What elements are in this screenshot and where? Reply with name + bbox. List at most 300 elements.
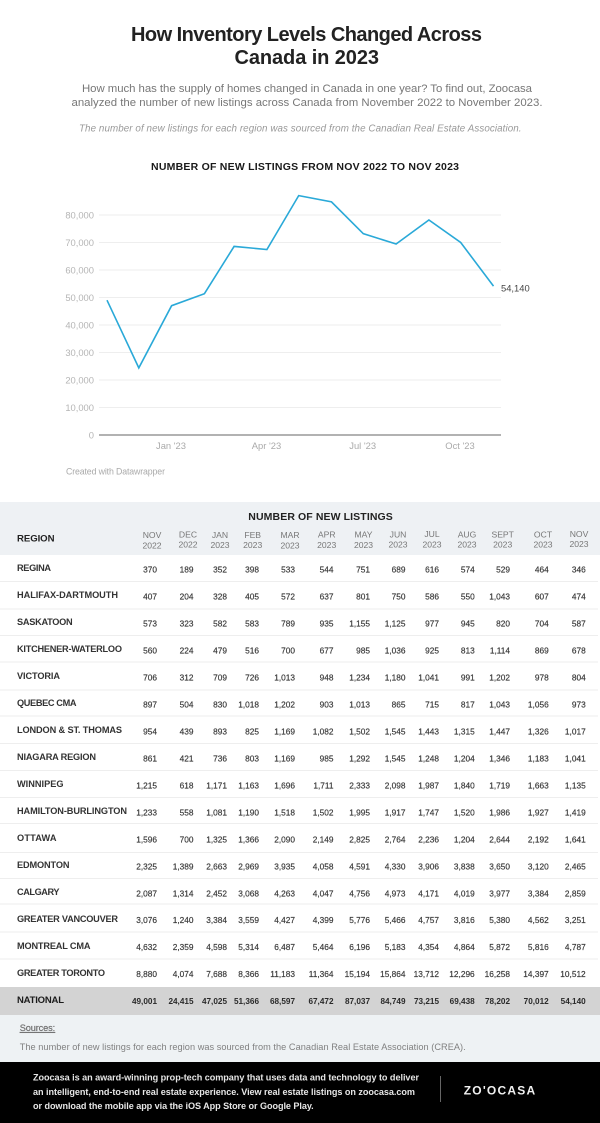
y axis labels: [65, 210, 94, 440]
row: Victoria: 804: [572, 673, 586, 683]
x axis labels: [156, 440, 475, 451]
row: London & St. Thomas: 1,169: [274, 726, 295, 736]
row: London & St. Thomas: 1,315: [454, 726, 475, 736]
row: Hamilton-Burlington: 1,233: [136, 808, 157, 818]
table header band: NUMBER OF NEW LISTINGS: [248, 511, 393, 523]
row: Montreal CMA: 5,464: [313, 942, 334, 952]
row: Halifax-Dartmouth: 405: [245, 592, 259, 602]
row: National: 84,749: [380, 997, 406, 1006]
table header band: FEB: [244, 530, 261, 540]
row: National: 54,140: [561, 997, 586, 1006]
table header band: 2023: [243, 540, 262, 550]
row: Montreal CMA: 4,632: [136, 942, 157, 952]
table header band: REGION: [17, 534, 55, 544]
row: Kitchener-Waterloo: 224: [180, 646, 194, 656]
row: London & St. Thomas: 954: [143, 726, 157, 736]
row: Victoria: VICTORIA: [17, 671, 60, 681]
row: Niagara Region: 1,346: [489, 754, 510, 764]
table header band: AUG: [458, 529, 477, 539]
x axis labels: Apr '23: [252, 440, 281, 451]
row: Greater Toronto: 8,366: [238, 969, 259, 979]
row: Calgary: 4,171: [418, 888, 439, 898]
row: Niagara Region: [17, 752, 586, 764]
footer text: or download the mobile app via the iOS App Store or Google Play.: [33, 1101, 314, 1111]
row: Regina: 352: [213, 565, 227, 575]
row: Hamilton-Burlington: 1,518: [274, 808, 295, 818]
row: Regina: 544: [320, 565, 334, 575]
table header band: APR: [318, 530, 336, 540]
row: National: 24,415: [168, 997, 194, 1006]
row: Winnipeg: 2,333: [349, 780, 370, 790]
title: Canada in 2023: [234, 47, 379, 69]
row: Niagara Region: 1,041: [565, 754, 586, 764]
row: Edmonton: 4,058: [313, 862, 334, 872]
row: Niagara Region: 1,204: [454, 754, 475, 764]
row: London & St. Thomas: 1,447: [489, 726, 510, 736]
row: Quebec CMA: 1,043: [489, 700, 510, 710]
row: National: 49,001: [132, 997, 157, 1006]
row: Edmonton: 1,389: [173, 862, 194, 872]
table header band: 2023: [569, 539, 589, 549]
row: Halifax-Dartmouth: 572: [281, 592, 295, 602]
row: Kitchener-Waterloo: 813: [461, 646, 475, 656]
row: Quebec CMA: 817: [461, 700, 475, 710]
row: Ottawa: 2,192: [528, 834, 549, 844]
row: National: 47,025: [202, 997, 227, 1006]
row: Regina: 346: [572, 565, 586, 575]
row: Ottawa: 2,644: [489, 834, 510, 844]
row: Halifax-Dartmouth: 586: [425, 592, 439, 602]
row: Calgary: 2,452: [206, 888, 227, 898]
intro text: [72, 83, 542, 109]
intro text: analyzed the number of new listings across Canada from November 2022 to November 2023.: [72, 97, 542, 109]
footer text: an intelligent, end-to-end real estate experience. View real estate listings on zoocasa.com: [33, 1087, 415, 1097]
row: Ottawa: 1,366: [238, 834, 259, 844]
row: Halifax-Dartmouth: 750: [392, 592, 406, 602]
row: London & St. Thomas: 825: [245, 726, 259, 736]
row: Victoria: 1,234: [349, 673, 370, 683]
table header band: MAR: [280, 530, 300, 540]
row: Regina: 751: [356, 565, 370, 575]
row: Greater Toronto: 15,194: [345, 969, 370, 979]
row: Greater Toronto: GREATER TORONTO: [17, 968, 105, 978]
footer text: Zoocasa is an award-winning prop-tech company that uses data and technology to deliver: [33, 1073, 419, 1083]
row: Hamilton-Burlington: [17, 806, 586, 818]
row: Ottawa: 2,090: [274, 834, 295, 844]
row: Halifax-Dartmouth: 204: [180, 592, 194, 602]
table header band: 2023: [533, 540, 553, 550]
row: Kitchener-Waterloo: 677: [320, 646, 334, 656]
row: Niagara Region: 1,292: [349, 754, 370, 764]
row: Quebec CMA: 830: [213, 700, 227, 710]
row: Saskatoon: 977: [425, 619, 439, 629]
logo: Zoocasa: ZO'OCASA: [464, 1083, 536, 1097]
row: Kitchener-Waterloo: 1,114: [490, 646, 510, 656]
row: Kitchener-Waterloo: 985: [356, 646, 370, 656]
row: Calgary: 4,973: [385, 888, 406, 898]
row: Kitchener-Waterloo: 869: [535, 646, 549, 656]
row: National: 73,215: [414, 997, 439, 1006]
row: Saskatoon: 945: [461, 619, 475, 629]
row: National: [0, 987, 600, 1015]
row: Greater Vancouver: 5,380: [489, 915, 510, 925]
row: Quebec CMA: 1,013: [349, 700, 370, 710]
row: Kitchener-Waterloo: 560: [143, 646, 157, 656]
row: Niagara Region: 1,169: [274, 754, 295, 764]
row: Montreal CMA: 2,359: [173, 942, 194, 952]
row: Hamilton-Burlington: HAMILTON-BURLINGTON: [17, 806, 127, 816]
row: Greater Toronto: 12,296: [449, 969, 475, 979]
row: Winnipeg: [17, 779, 586, 790]
row: Hamilton-Burlington: 1,081: [206, 808, 227, 818]
row: Halifax-Dartmouth: 328: [213, 592, 227, 602]
row: Niagara Region: 985: [320, 754, 334, 764]
sources panel: The number of new listings for each region was sourced from the Canadian Real Estate Association (CREA).: [20, 1042, 466, 1052]
row: Ottawa: 2,149: [313, 834, 334, 844]
row: Greater Toronto: 4,074: [173, 969, 194, 979]
y axis labels: 50,000: [65, 292, 94, 303]
row: London & St. Thomas: 1,017: [565, 726, 586, 736]
row: Niagara Region: 803: [245, 754, 259, 764]
row: Saskatoon: 583: [245, 619, 259, 629]
x axis labels: Jan '23: [156, 440, 186, 451]
row: Greater Toronto: 11,364: [309, 969, 334, 979]
row: Greater Vancouver: 4,427: [274, 915, 295, 925]
row: Ottawa: 1,325: [206, 834, 227, 844]
row: Montreal CMA: 5,872: [489, 942, 510, 952]
row: Victoria: 991: [461, 673, 475, 683]
table header band: MAY: [355, 530, 373, 540]
row: Victoria: 948: [320, 673, 334, 683]
y axis labels: 20,000: [65, 374, 94, 386]
row: London & St. Thomas: 1,326: [528, 726, 549, 736]
row: Greater Vancouver: 4,399: [313, 915, 334, 925]
row: Winnipeg: 1,719: [489, 780, 510, 790]
row: Kitchener-Waterloo: [17, 644, 586, 656]
footer band: [0, 1062, 600, 1123]
row: National: 70,012: [524, 997, 549, 1006]
sources panel: [0, 1015, 600, 1062]
x axis labels: Jul '23: [349, 440, 376, 451]
row: Calgary: 3,068: [238, 888, 259, 898]
row: Winnipeg: WINNIPEG: [17, 779, 64, 789]
row: Edmonton: [17, 860, 586, 872]
row: Winnipeg: 1,663: [528, 780, 549, 790]
table header band: 2023: [388, 540, 408, 550]
row: Greater Vancouver: 3,559: [238, 915, 259, 925]
row: Winnipeg: 2,098: [385, 780, 406, 790]
row: Greater Toronto: 15,864: [380, 969, 406, 979]
row: Edmonton: 3,935: [274, 862, 295, 872]
row: Niagara Region: 1,183: [528, 754, 549, 764]
row: Edmonton: 4,330: [385, 862, 406, 872]
row: Greater Vancouver: 4,757: [418, 915, 439, 925]
row: Saskatoon: 323: [180, 619, 194, 629]
row: Montreal CMA: 4,864: [454, 942, 475, 952]
row: Victoria: 1,041: [418, 673, 439, 683]
row: Ottawa: 1,596: [136, 834, 157, 844]
row: Regina: 529: [496, 565, 510, 575]
row: Greater Vancouver: 3,384: [206, 915, 227, 925]
row: London & St. Thomas: 1,502: [349, 726, 370, 736]
row: Greater Vancouver: 3,076: [136, 915, 157, 925]
row: Montreal CMA: [17, 941, 586, 952]
footer text: [33, 1073, 419, 1111]
row: Victoria: [17, 671, 586, 683]
row: Kitchener-Waterloo: 678: [572, 646, 586, 656]
row: Montreal CMA: 6,487: [274, 942, 295, 952]
row: Quebec CMA: 897: [143, 700, 157, 710]
row: Greater Vancouver: 3,251: [565, 915, 586, 925]
row: Hamilton-Burlington: 558: [180, 808, 194, 818]
table header band: NOV: [570, 529, 589, 539]
row: Winnipeg: 618: [180, 780, 194, 790]
row: Montreal CMA: 5,314: [238, 942, 259, 952]
row: London & St. Thomas: LONDON & ST. THOMAS: [17, 725, 122, 735]
row: Montreal CMA: 4,598: [206, 942, 227, 952]
row: Quebec CMA: QUEBEC CMA: [17, 698, 77, 708]
row: Quebec CMA: 504: [180, 700, 194, 710]
row: Regina: 689: [392, 565, 406, 575]
table header band: NOV: [143, 530, 162, 540]
row: Niagara Region: 861: [143, 754, 157, 764]
end value label: 54,140: [501, 282, 530, 294]
row: Greater Toronto: 11,183: [270, 969, 295, 979]
row: Saskatoon: 704: [535, 619, 549, 629]
row: Halifax-Dartmouth: 637: [320, 592, 334, 602]
row: Montreal CMA: 6,196: [349, 942, 370, 952]
row: Regina: 370: [143, 565, 157, 575]
line chart: [65, 196, 530, 451]
row: Quebec CMA: [17, 698, 586, 710]
row: Winnipeg: 1,711: [313, 780, 334, 790]
row: Montreal CMA: 4,787: [565, 942, 586, 952]
chart credit: Created with Datawrapper: [66, 466, 165, 476]
table header band: JAN: [212, 530, 228, 540]
row: Edmonton: EDMONTON: [17, 860, 70, 870]
row: London & St. Thomas: 893: [213, 726, 227, 736]
row: Winnipeg: 1,987: [418, 780, 439, 790]
row: Winnipeg: 1,215: [136, 780, 157, 790]
row: Greater Toronto: 16,258: [485, 969, 510, 979]
table header band: 2023: [493, 540, 512, 550]
y axis labels: 70,000: [65, 237, 94, 248]
x axis labels: Oct '23: [445, 440, 475, 451]
row: National: 69,438: [450, 997, 475, 1006]
y axis labels: 10,000: [65, 402, 94, 413]
row: Saskatoon: 573: [143, 619, 157, 629]
row: National: 67,472: [308, 997, 334, 1006]
row: Niagara Region: 421: [180, 754, 194, 764]
row: Hamilton-Burlington: 1,986: [489, 808, 510, 818]
row: Calgary: 2,859: [565, 888, 586, 898]
row: Calgary: 4,263: [274, 888, 295, 898]
row: Winnipeg: 1,171: [206, 780, 227, 790]
row: Hamilton-Burlington: 1,419: [565, 808, 586, 818]
row: Quebec CMA: 715: [425, 700, 439, 710]
row: National: 51,366: [234, 997, 259, 1006]
row: Victoria: 1,180: [385, 673, 406, 683]
row: Victoria: 1,202: [489, 673, 510, 683]
row: Greater Toronto: 7,688: [206, 969, 227, 979]
row: Greater Vancouver: 3,816: [454, 915, 475, 925]
row: Ottawa: 2,236: [418, 834, 439, 844]
row: Niagara Region: NIAGARA REGION: [17, 752, 96, 762]
row: Victoria: 1,013: [274, 673, 295, 683]
row: Quebec CMA: 1,202: [274, 700, 295, 710]
row: Quebec CMA: 865: [392, 700, 406, 710]
row: Victoria: 978: [535, 673, 549, 683]
row: Edmonton: 2,969: [238, 862, 259, 872]
row: London & St. Thomas: 1,443: [418, 726, 439, 736]
row: Quebec CMA: 973: [572, 700, 586, 710]
row: Halifax-Dartmouth: [17, 590, 586, 602]
row: Halifax-Dartmouth: 607: [535, 592, 549, 602]
row: National: 87,037: [345, 997, 370, 1006]
table header band: 2023: [422, 539, 442, 549]
row: Edmonton: 2,663: [206, 862, 227, 872]
row: Kitchener-Waterloo: KITCHENER-WATERLOO: [17, 644, 122, 654]
row: Niagara Region: 736: [213, 754, 227, 764]
row: Calgary: 3,384: [528, 888, 549, 898]
table header band: JUN: [390, 529, 406, 539]
row: Victoria: 709: [213, 673, 227, 683]
table header band: DEC: [179, 530, 197, 540]
row: Winnipeg: 1,696: [274, 780, 295, 790]
row: Greater Vancouver: GREATER VANCOUVER: [17, 914, 118, 924]
row: Edmonton: 2,465: [565, 862, 586, 872]
row: Saskatoon: 1,155: [349, 619, 370, 629]
row: Kitchener-Waterloo: 700: [281, 646, 295, 656]
row: Hamilton-Burlington: 1,917: [385, 808, 406, 818]
row: Ottawa: OTTAWA: [17, 833, 57, 843]
row: Quebec CMA: 1,056: [528, 700, 549, 710]
row: Calgary: 4,756: [349, 888, 370, 898]
sources panel: Sources:: [20, 1023, 55, 1033]
row: Saskatoon: 789: [281, 619, 295, 629]
table header band: 2023: [457, 540, 477, 550]
row: Regina: 574: [461, 565, 475, 575]
table header band: OCT: [534, 529, 553, 539]
row: Ottawa: 2,825: [349, 834, 370, 844]
row: Regina: 464: [535, 565, 549, 575]
row: Calgary: CALGARY: [17, 887, 60, 897]
row: Greater Toronto: 13,712: [414, 969, 439, 979]
row: Regina: [17, 563, 586, 575]
row: Regina: 533: [281, 565, 295, 575]
row: Quebec CMA: 1,018: [238, 700, 259, 710]
row: Calgary: 3,977: [489, 888, 510, 898]
row: Greater Toronto: 14,397: [523, 969, 549, 979]
row: Ottawa: [17, 833, 586, 844]
row: Halifax-Dartmouth: 801: [356, 592, 370, 602]
row: Edmonton: 3,906: [418, 862, 439, 872]
row: Greater Vancouver: 5,466: [385, 915, 406, 925]
row: Halifax-Dartmouth: HALIFAX-DARTMOUTH: [17, 590, 118, 600]
source note: The number of new listings for each region was sourced from the Canadian Real Estate Association.: [79, 124, 522, 134]
table header band: 2023: [317, 540, 336, 550]
row: Calgary: 1,314: [173, 888, 194, 898]
table header band: 2023: [354, 540, 373, 550]
row: Ottawa: 2,764: [385, 834, 406, 844]
row: Greater Toronto: 10,512: [560, 969, 586, 979]
row: London & St. Thomas: 1,545: [385, 726, 406, 736]
row: Saskatoon: 587: [572, 619, 586, 629]
row: Halifax-Dartmouth: 550: [461, 592, 475, 602]
table: [0, 502, 600, 1015]
row: Edmonton: 3,650: [489, 862, 510, 872]
row: Regina: REGINA: [17, 563, 51, 573]
row: National: NATIONAL: [17, 995, 64, 1006]
table header band: [0, 502, 600, 555]
row: Calgary: 4,019: [454, 888, 475, 898]
row: Kitchener-Waterloo: 479: [213, 646, 227, 656]
row: National: 68,597: [270, 997, 295, 1006]
row: Quebec CMA: 903: [320, 700, 334, 710]
row: Hamilton-Burlington: 1,190: [238, 808, 259, 818]
row: Calgary: [17, 887, 586, 898]
title: [131, 24, 482, 69]
row: Greater Toronto: 8,880: [136, 969, 157, 979]
table header band: 2023: [210, 540, 230, 550]
row: Kitchener-Waterloo: 925: [425, 646, 439, 656]
row: Niagara Region: 1,545: [385, 754, 406, 764]
row: London & St. Thomas: 439: [180, 726, 194, 736]
row: Saskatoon: SASKATOON: [17, 617, 73, 627]
row: Regina: 398: [245, 565, 259, 575]
row: Montreal CMA: 4,354: [418, 942, 439, 952]
y axis labels: 0: [89, 430, 94, 440]
row: Kitchener-Waterloo: 1,036: [385, 646, 406, 656]
table header band: 2023: [280, 540, 300, 550]
row: Niagara Region: 1,248: [418, 754, 439, 764]
table header band: SEPT: [491, 530, 515, 540]
row: Halifax-Dartmouth: 1,043: [489, 592, 510, 602]
row: Victoria: 312: [180, 673, 194, 683]
intro text: How much has the supply of homes changed in Canada in one year? To find out, Zoocasa: [82, 83, 533, 95]
y axis labels: 30,000: [65, 347, 94, 358]
row: Winnipeg: 1,135: [565, 780, 586, 790]
row: Calgary: 2,087: [136, 888, 157, 898]
row: Calgary: 4,047: [313, 888, 334, 898]
y axis labels: 80,000: [65, 210, 94, 220]
row: Montreal CMA: 5,816: [528, 942, 549, 952]
table header band: 2022: [178, 540, 198, 550]
row: London & St. Thomas: 1,082: [313, 726, 334, 736]
row: Edmonton: 2,325: [136, 862, 157, 872]
data line: [107, 196, 494, 368]
row: Ottawa: 1,641: [565, 834, 586, 844]
row: Hamilton-Burlington: 1,995: [349, 808, 370, 818]
row: Ottawa: 700: [180, 834, 194, 844]
row: Regina: 189: [180, 565, 194, 575]
row: Ottawa: 1,204: [454, 834, 475, 844]
y axis labels: 60,000: [65, 264, 94, 276]
row: Montreal CMA: MONTREAL CMA: [17, 941, 91, 951]
row: Winnipeg: 1,840: [454, 780, 475, 790]
title: How Inventory Levels Changed Across: [131, 24, 482, 46]
row: Kitchener-Waterloo: 516: [245, 646, 259, 656]
row: Saskatoon: 582: [213, 619, 227, 629]
row: Halifax-Dartmouth: 474: [572, 592, 586, 602]
row: Edmonton: 3,120: [528, 862, 549, 872]
row: Hamilton-Burlington: 1,747: [418, 808, 439, 818]
row: Greater Toronto: [17, 968, 586, 979]
row: Saskatoon: 820: [496, 619, 510, 629]
row: Saskatoon: 935: [320, 619, 334, 629]
row: Hamilton-Burlington: 1,520: [454, 808, 475, 818]
row: Greater Vancouver: 1,240: [173, 915, 194, 925]
